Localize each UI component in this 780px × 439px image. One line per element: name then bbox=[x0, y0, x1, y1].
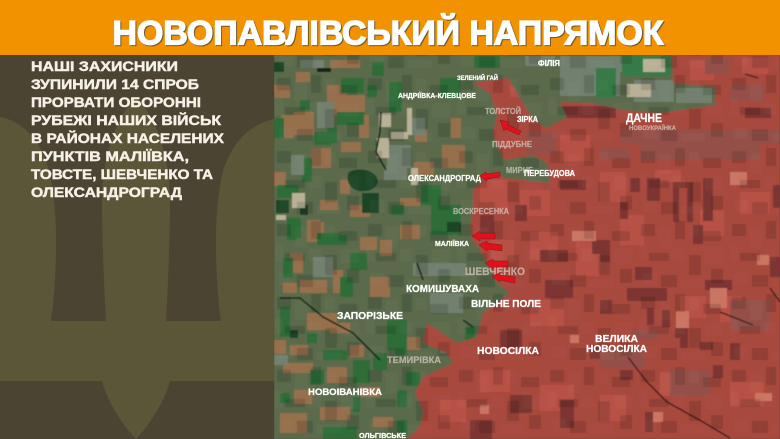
map label: Шевченко: ШЕВЧЕНКО bbox=[465, 266, 525, 278]
map label: Темирівка: ТЕМИРІВКА bbox=[387, 355, 441, 366]
text block: summary: ПРОРВАТИ ОБОРОННІ bbox=[31, 95, 201, 110]
arrow: Толстой bbox=[500, 120, 521, 135]
icon: trident emblem bbox=[0, 97, 274, 439]
map label: Перебудова: ПЕРЕБУДОВА bbox=[524, 169, 575, 178]
map label: Філія: ФІЛІЯ bbox=[538, 59, 560, 68]
map label: Толстой: ТОЛСТОЙ bbox=[485, 107, 521, 116]
arrow: Воскресенка bbox=[472, 231, 495, 241]
arrow: Маліївка bbox=[479, 241, 502, 251]
map label: Велика Новосілка: ВЕЛИКА bbox=[595, 334, 638, 345]
map label: Новосілка: НОВОСІЛКА bbox=[477, 345, 539, 357]
red occupied area bbox=[407, 55, 780, 439]
text block: summary: ЗУПИНИЛИ 14 СПРОБ bbox=[31, 77, 199, 92]
panel: left background bbox=[0, 55, 274, 439]
text block: summary: ТОВСТЕ, ШЕВЧЕНКО ТА bbox=[31, 167, 213, 182]
map label: Вільне Поле: ВІЛЬНЕ ПОЛЕ bbox=[471, 298, 541, 310]
title: НОВОПАВЛІВСЬКИЙ НАПРЯМОК bbox=[112, 14, 664, 52]
map label: Велика Новосілка: НОВОСІЛКА bbox=[586, 344, 647, 355]
map label: Зелений Гай: ЗЕЛЕНИЙ ГАЙ bbox=[457, 73, 498, 82]
text block: summary: В РАЙОНАХ НАСЕЛЕНИХ bbox=[31, 131, 224, 146]
text block: summary bbox=[31, 59, 224, 200]
map label: Комишуваха: КОМИШУВАХА bbox=[406, 284, 479, 295]
header band bbox=[0, 0, 780, 55]
arrow: Олександроград bbox=[479, 172, 500, 181]
map label: Новоукраїнка: НОВОУКРАЇНКА bbox=[629, 124, 676, 132]
map label: Олександроград: ОЛЕКСАНДРОГРАД bbox=[408, 174, 481, 183]
map label: Дачне: ДАЧНЕ bbox=[626, 111, 662, 125]
arrow: Шевченко south bbox=[492, 273, 515, 283]
text block: summary: ОЛЕКСАНДРОГРАД bbox=[31, 185, 182, 200]
map label: Мирне: МИРНЕ bbox=[506, 166, 534, 175]
map label: Маліївка: МАЛІЇВКА bbox=[435, 240, 469, 248]
map label: Зірка: ЗІРКА bbox=[517, 115, 538, 124]
text block: summary: НАШІ ЗАХИСНИКИ bbox=[31, 59, 178, 74]
map label: Воскресенка: ВОСКРЕСЕНКА bbox=[453, 207, 509, 216]
map label: Запорізьке: ЗАПОРІЗЬКЕ bbox=[337, 311, 403, 322]
map label: Піддубне: ПІДДУБНЕ bbox=[492, 140, 533, 149]
panel: satellite map bbox=[274, 55, 780, 439]
arrow: Шевченко north bbox=[485, 259, 508, 269]
text block: summary: РУБЕЖІ НАШИХ ВІЙСЬК bbox=[31, 113, 222, 128]
map label: Новоіванівка: НОВОІВАНІВКА bbox=[308, 387, 382, 398]
map label: Велика Новосілка bbox=[586, 334, 647, 352]
text block: summary: ПУНКТІВ МАЛІЇВКА, bbox=[31, 149, 189, 164]
map label: Андріївка-Клевцове: АНДРІЇВКА-КЛЕВЦОВЕ bbox=[398, 92, 476, 100]
